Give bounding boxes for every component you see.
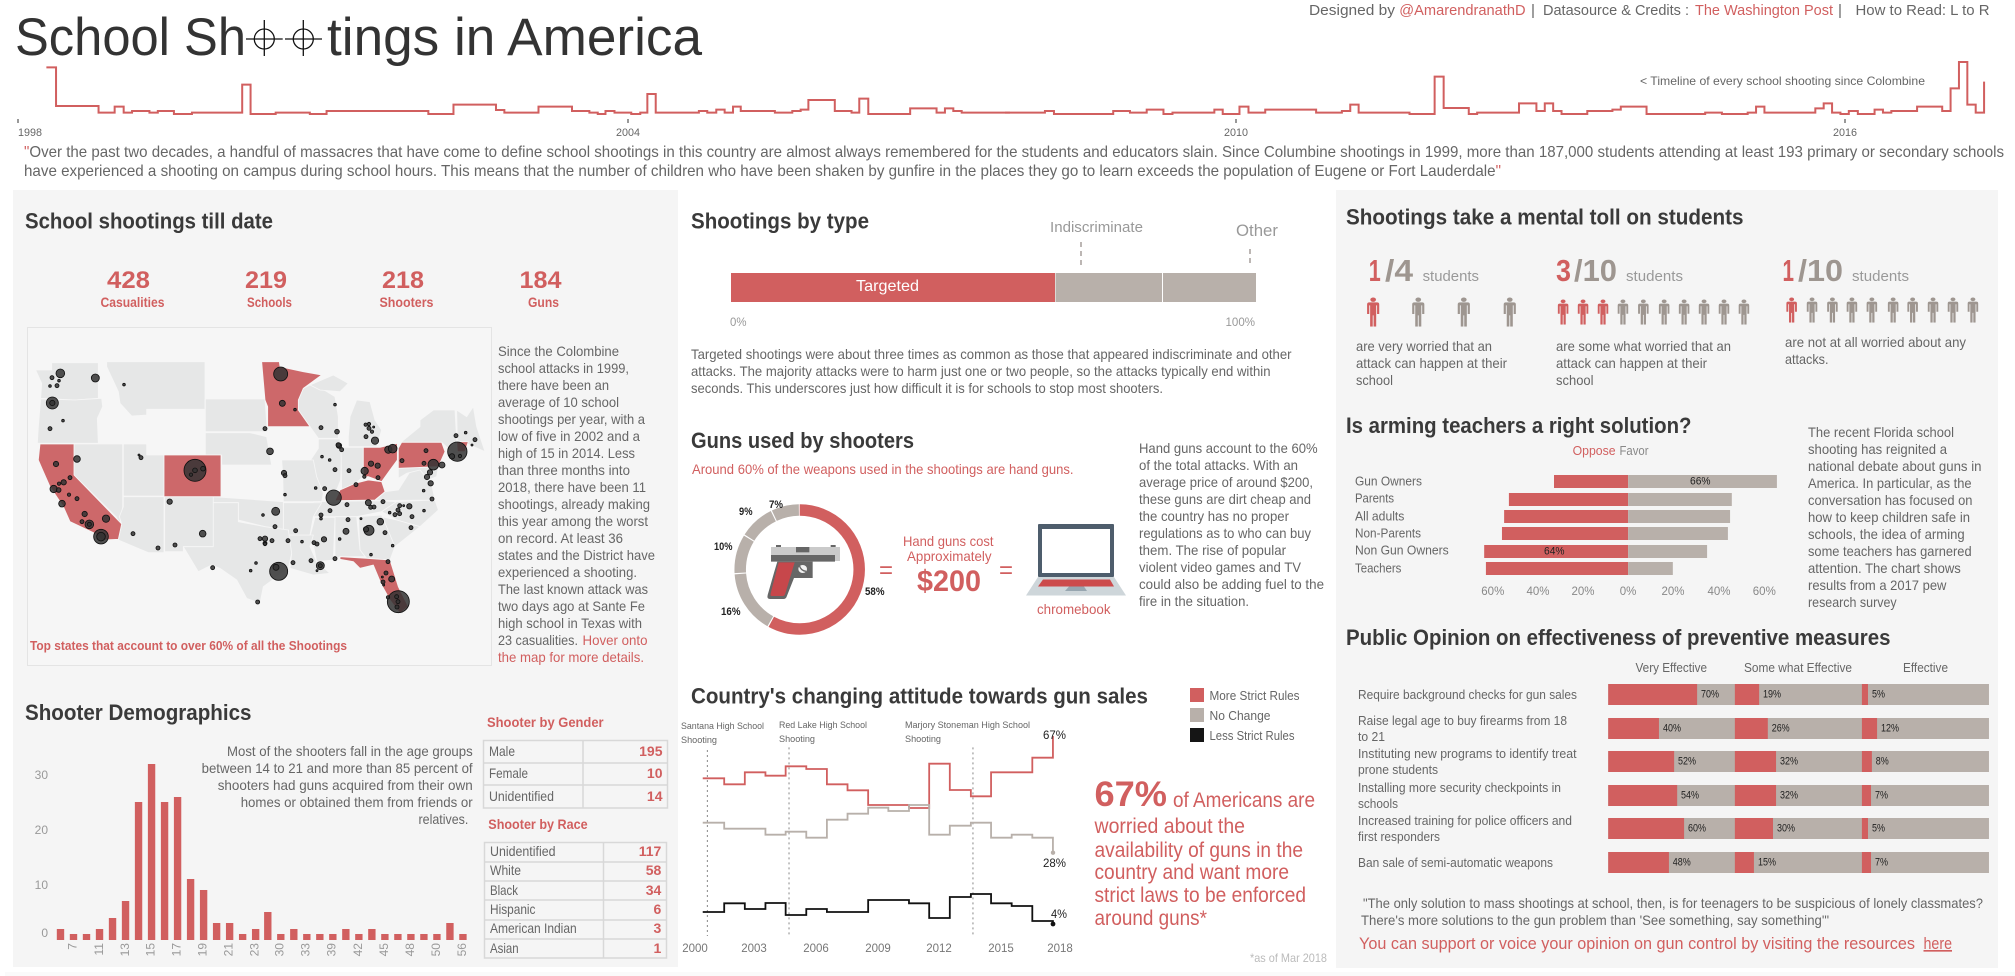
line chart: attitudes on gun sales: Shooting bbox=[905, 734, 941, 745]
text: hand guns paragraph bbox=[1139, 440, 1324, 609]
diverging bar chart: arming teachers: 60% bbox=[1753, 586, 1776, 598]
stacked bars: preventive measures: 48% bbox=[1673, 856, 1691, 868]
panel: left column bbox=[13, 190, 678, 967]
stat: one in four: 1 bbox=[1369, 253, 1381, 288]
stacked bars: preventive measures: 12% bbox=[1881, 722, 1899, 734]
callout: 67 percent of americans: country and want more bbox=[1094, 861, 1289, 884]
stacked bars: preventive measures: 19% bbox=[1763, 688, 1781, 700]
diverging bar chart: arming teachers: Parents bbox=[1355, 491, 1394, 506]
histogram: shooter age: 0 bbox=[41, 926, 48, 940]
icons: three of ten people bbox=[1558, 299, 1749, 325]
text: colombine paragraph: The last known attack was bbox=[498, 581, 648, 597]
callout: 67 percent of americans: around guns* bbox=[1094, 907, 1207, 930]
panel: right column bbox=[1336, 190, 1998, 968]
credits line: The Washington Post bbox=[1695, 2, 1834, 19]
text: hand guns paragraph: could also be adding fuel to the bbox=[1139, 576, 1324, 592]
stat: three in ten bbox=[1556, 253, 1749, 388]
line chart: attitudes on gun sales bbox=[681, 720, 1073, 955]
histogram: shooter age: 33 bbox=[299, 943, 313, 956]
line chart: attitudes on gun sales: 28% bbox=[1043, 856, 1066, 870]
line chart: attitudes on gun sales: 4% bbox=[1051, 907, 1067, 921]
credits line bbox=[1309, 2, 1990, 19]
text: colombine paragraph: there have been an bbox=[498, 377, 609, 393]
icon: chromebook laptop bbox=[1026, 524, 1126, 617]
diverging bar chart: arming teachers: 0% bbox=[1620, 586, 1636, 598]
table: shooter by gender bbox=[484, 740, 668, 808]
diverging bar chart: arming teachers: 20% bbox=[1571, 586, 1595, 598]
stacked bars: preventive measures: 7% bbox=[1875, 789, 1888, 801]
timeline step chart: 2004 bbox=[616, 127, 640, 139]
line chart: attitudes on gun sales: 2006 bbox=[803, 943, 829, 955]
line chart: attitudes on gun sales: Santana High School bbox=[681, 721, 764, 732]
table: shooter by gender: 10 bbox=[647, 765, 663, 781]
line chart: attitudes on gun sales: 2009 bbox=[865, 943, 891, 955]
text: arming teachers paragraph: attention. The chart shows bbox=[1808, 560, 1961, 576]
heading: shooter by gender: Shooter by Gender bbox=[487, 714, 604, 730]
timeline step chart: 1998 bbox=[18, 127, 42, 139]
credits line: Datasource & Credits : bbox=[1543, 2, 1689, 19]
histogram: shooter age: 56 bbox=[455, 943, 469, 956]
table: shooter by race: Hispanic bbox=[490, 901, 536, 917]
credits line: @AmarendranathD bbox=[1399, 2, 1526, 19]
donut chart: guns: 16% bbox=[721, 606, 741, 618]
text: colombine paragraph: the map for more details. bbox=[498, 649, 644, 665]
stacked bars: preventive measures: 7% bbox=[1875, 856, 1888, 868]
stacked bars: preventive measures: first responders bbox=[1358, 829, 1440, 844]
stacked bar: shootings by type: Targeted bbox=[856, 278, 919, 295]
stacked bars: preventive measures: 54% bbox=[1681, 789, 1699, 801]
text: arming teachers paragraph: shooting has reignited a bbox=[1808, 441, 1947, 457]
line chart: attitudes on gun sales: 2015 bbox=[988, 943, 1014, 955]
heading: changing attitude: Country's changing attitude towards gun sales bbox=[691, 684, 1148, 708]
table: shooter by race: 3 bbox=[654, 920, 662, 936]
text: shootings by type paragraph bbox=[691, 346, 1292, 396]
table: shooter by race: Black bbox=[490, 882, 519, 898]
table: shooter by gender: Female bbox=[489, 765, 528, 781]
panel: middle column bbox=[681, 208, 1327, 965]
heading: school shootings till date: School shootings till date bbox=[25, 208, 273, 234]
stat: shooters: Shooters bbox=[380, 294, 434, 310]
text: arming teachers paragraph: conversation has focused on bbox=[1808, 492, 1972, 508]
histogram: shooter age: 30 bbox=[273, 943, 287, 956]
line chart: attitudes on gun sales: 2000 bbox=[682, 943, 708, 955]
stacked bar: shootings by type bbox=[730, 219, 1278, 329]
table: shooter by race: 6 bbox=[654, 901, 662, 917]
histogram: shooter age: 50 bbox=[429, 943, 443, 956]
stacked bars: preventive measures: 5% bbox=[1872, 688, 1885, 700]
stat: three in ten: 3 bbox=[1556, 253, 1571, 288]
stacked bars: preventive measures: Increased training for police officers and bbox=[1358, 813, 1572, 828]
text: arming teachers paragraph: national debate about guns in bbox=[1808, 458, 1982, 474]
histogram: shooter age: 23 bbox=[248, 943, 262, 956]
legend: Less Strict Rules bbox=[1210, 729, 1294, 743]
stat: one in four: are very worried that an bbox=[1356, 338, 1492, 354]
text: colombine paragraph: Since the Colombine bbox=[498, 343, 619, 359]
line chart: attitudes on gun sales: Shooting bbox=[681, 735, 717, 746]
table: shooter by race: 117 bbox=[639, 843, 662, 859]
stacked bars: preventive measures: Very Effective bbox=[1636, 660, 1707, 675]
stat: casualities bbox=[100, 267, 165, 310]
footnote: *as of Mar 2018 bbox=[1250, 951, 1327, 965]
stat: one in four: students bbox=[1423, 268, 1479, 285]
stat: shooters: 218 bbox=[382, 267, 424, 294]
table: shooter by race: White bbox=[490, 862, 521, 878]
stat: one in four: school bbox=[1356, 372, 1393, 388]
histogram: shooter age: 48 bbox=[403, 943, 417, 956]
text: hand guns paragraph: of the total attacks. With an bbox=[1139, 457, 1298, 473]
title: tings in America bbox=[327, 8, 703, 67]
shooting location bubbles bbox=[46, 367, 477, 613]
stat: shooters bbox=[380, 267, 434, 310]
callout: 67 percent of americans: 67% bbox=[1094, 775, 1167, 814]
stat: schools: Schools bbox=[247, 294, 292, 310]
text: colombine paragraph: experienced a shooting. bbox=[498, 564, 637, 580]
text: hand guns paragraph: average price of around $200, bbox=[1139, 474, 1313, 490]
text: colombine paragraph: shootings, already making bbox=[498, 496, 650, 512]
stat: guns: Guns bbox=[528, 294, 559, 310]
call to action: You can support or voice your opinion on gun control by visiting the resources bbox=[1359, 935, 1915, 953]
histogram: shooter age: 19 bbox=[196, 943, 210, 956]
stacked bars: preventive measures: Require background checks for gun sales bbox=[1358, 687, 1577, 702]
line chart: attitudes on gun sales: 2018 bbox=[1047, 943, 1073, 955]
line chart: attitudes on gun sales: Shooting bbox=[779, 734, 815, 745]
stacked bar: shootings by type: Other bbox=[1236, 221, 1278, 240]
credits line: | bbox=[1531, 2, 1535, 19]
table: shooter by gender: 14 bbox=[647, 788, 663, 804]
stacked bars: preventive measures: prone students bbox=[1358, 762, 1438, 777]
icon: handgun bbox=[767, 545, 840, 599]
text: arming teachers paragraph: results from a 2017 pew bbox=[1808, 577, 1947, 593]
intro quote: have experienced a shooting on campus during school hours. This means that the number of children who have been shaken by gunfire in the places they go to learn exceeds the population of Eugene or Fort Lauderdale" bbox=[24, 163, 1501, 180]
stat: one in ten: attacks. bbox=[1785, 351, 1828, 367]
donut chart: guns: 7% bbox=[769, 499, 783, 511]
diverging bar chart: arming teachers: All adults bbox=[1355, 509, 1405, 524]
heading: arming teachers: Is arming teachers a right solution? bbox=[1346, 413, 1692, 438]
diverging bar chart: arming teachers: 20% bbox=[1661, 586, 1685, 598]
diverging bar chart: arming teachers bbox=[1355, 444, 1777, 598]
diverging bar chart: arming teachers: 64% bbox=[1544, 546, 1565, 558]
callout: hand gun cost bbox=[903, 533, 994, 598]
text: colombine paragraph: two days ago at Sante Fe bbox=[498, 598, 645, 614]
text: colombine paragraph: this year among the worst bbox=[498, 513, 648, 529]
stat: guns bbox=[520, 267, 562, 310]
timeline step chart: 2016 bbox=[1833, 127, 1857, 139]
line chart: attitudes on gun sales: Marjory Stoneman High School bbox=[905, 720, 1030, 731]
table: shooter by race: 34 bbox=[646, 882, 662, 898]
credits line: | bbox=[1838, 2, 1842, 19]
histogram: shooter age: 30 bbox=[35, 768, 48, 782]
stacked bars: preventive measures bbox=[1358, 660, 1989, 873]
stat: three in ten: /10 bbox=[1574, 253, 1617, 288]
stacked bars: preventive measures: 8% bbox=[1876, 755, 1889, 767]
stat: three in ten: attack can happen at their bbox=[1556, 355, 1707, 371]
title bbox=[15, 8, 703, 67]
text: arming teachers paragraph: research survey bbox=[1808, 594, 1897, 610]
icons: one of four people bbox=[1367, 297, 1516, 327]
text: demographics paragraph: Most of the shooters fall in the age groups bbox=[227, 743, 473, 759]
stacked bars: preventive measures: 52% bbox=[1678, 755, 1696, 767]
histogram: shooter age: 13 bbox=[118, 943, 132, 956]
line chart: attitudes on gun sales: 2012 bbox=[926, 943, 952, 955]
stacked bars: preventive measures: Instituting new programs to identify treat bbox=[1358, 746, 1577, 761]
stacked bars: preventive measures: schools bbox=[1358, 796, 1398, 811]
callout: 67 percent of americans bbox=[1094, 775, 1315, 930]
text: colombine paragraph: on record. At least 36 bbox=[498, 530, 623, 546]
stacked bar: shootings by type: Indiscriminate bbox=[1050, 219, 1143, 236]
histogram: shooter age: 11 bbox=[92, 943, 106, 955]
text: demographics paragraph: homes or obtained them from friends or bbox=[241, 794, 473, 810]
stat: one in four: /4 bbox=[1385, 253, 1414, 288]
histogram: shooter age: 7 bbox=[65, 943, 79, 950]
stat: three in ten: school bbox=[1556, 372, 1594, 388]
heading: shooter by race: Shooter by Race bbox=[488, 816, 588, 832]
stat: one in ten bbox=[1782, 253, 1978, 367]
closing quote bbox=[1361, 895, 1983, 928]
text: hand guns paragraph: regulations as to who can buy bbox=[1139, 525, 1311, 541]
stacked bars: preventive measures: 26% bbox=[1772, 722, 1790, 734]
stat: one in ten: 1 bbox=[1782, 253, 1794, 288]
stat: one in four bbox=[1356, 253, 1516, 388]
equals sign: = bbox=[879, 557, 893, 584]
stat: one in ten: /10 bbox=[1798, 253, 1843, 288]
icon: chromebook laptop: chromebook bbox=[1037, 601, 1111, 617]
text: hand guns paragraph: violent video games and TV bbox=[1139, 559, 1302, 575]
text: colombine paragraph: states and the District have bbox=[498, 547, 655, 563]
table: shooter by race: 58 bbox=[646, 862, 662, 878]
map caption: Top states that account to over 60% of all the Shootings bbox=[30, 638, 347, 653]
callout: hand gun cost: $200 bbox=[917, 565, 981, 598]
legend: More Strict Rules bbox=[1210, 689, 1300, 703]
stat: one in ten: are not at all worried about any bbox=[1785, 334, 1966, 350]
legend: No Change bbox=[1210, 709, 1271, 723]
table: shooter by race: American Indian bbox=[490, 920, 577, 936]
stat: schools: 219 bbox=[245, 267, 287, 294]
call to action: here bbox=[1924, 935, 1952, 953]
text: demographics paragraph: relatives. bbox=[418, 811, 468, 827]
diverging bar chart: arming teachers: 66% bbox=[1690, 476, 1711, 488]
table: shooter by gender: Unidentified bbox=[489, 788, 554, 804]
stacked bars: preventive measures: 32% bbox=[1780, 755, 1798, 767]
heading: public opinion: Public Opinion on effectiveness of preventive measures bbox=[1346, 625, 1890, 650]
histogram: shooter age: 45 bbox=[377, 943, 391, 956]
stat: guns: 184 bbox=[520, 267, 562, 294]
closing quote: There's more solutions to the gun problem than 'See something, say something'" bbox=[1361, 912, 1829, 928]
stat: three in ten: are some what worried that an bbox=[1556, 338, 1731, 354]
text: colombine paragraph: school attacks in 1999, bbox=[498, 360, 629, 376]
table: shooter by gender: Male bbox=[489, 743, 515, 759]
timeline step chart: 2010 bbox=[1224, 127, 1248, 139]
text: colombine paragraph: than three months into bbox=[498, 462, 630, 478]
text: arming teachers paragraph: schools, the idea of arming bbox=[1808, 526, 1965, 542]
heading: shootings by type: Shootings by type bbox=[691, 208, 869, 234]
callout: 67 percent of americans: availability of guns in the bbox=[1094, 839, 1303, 862]
us state map bbox=[36, 362, 485, 613]
stacked bars: preventive measures: to 21 bbox=[1358, 729, 1385, 744]
text: demographics paragraph bbox=[202, 743, 473, 827]
stacked bar: shootings by type: 100% bbox=[1226, 315, 1255, 329]
diverging bar chart: arming teachers: Gun Owners bbox=[1355, 474, 1422, 489]
icons: one of ten people bbox=[1786, 297, 1978, 323]
callout: hand gun cost: Approximately bbox=[907, 548, 992, 564]
histogram: shooter age: 17 bbox=[170, 943, 184, 956]
histogram: shooter age: 15 bbox=[144, 943, 158, 956]
histogram: shooter age: 42 bbox=[351, 943, 365, 956]
stacked bars: preventive measures: Ban sale of semi-automatic weapons bbox=[1358, 855, 1553, 870]
text: arming teachers paragraph: America. In particular, as the bbox=[1808, 475, 1972, 491]
text: colombine paragraph: low of five in 2002 and a bbox=[498, 428, 640, 444]
map box bbox=[28, 328, 492, 666]
stacked bars: preventive measures: Effective bbox=[1903, 660, 1948, 675]
histogram: shooter age: 10 bbox=[35, 878, 48, 892]
text: demographics paragraph: between 14 to 21 and more than 85 percent of bbox=[202, 760, 473, 776]
diverging bar chart: arming teachers: Favor bbox=[1620, 444, 1648, 458]
diverging bar chart: arming teachers: 40% bbox=[1707, 586, 1731, 598]
stacked bars: preventive measures: Some what Effective bbox=[1744, 660, 1852, 675]
stat: three in ten: students bbox=[1626, 268, 1683, 285]
stat: casualities: Casualities bbox=[100, 294, 165, 310]
highlighted top states bbox=[38, 362, 468, 613]
text: colombine paragraph: shootings per year, with a bbox=[498, 411, 645, 427]
histogram: shooter age: 21 bbox=[222, 943, 236, 956]
text: shootings by type paragraph: seconds. This underscores just how difficult it is for schools to stop most shooters. bbox=[691, 380, 1163, 396]
histogram: shooter age: 20 bbox=[35, 823, 48, 837]
text: colombine paragraph: Hover onto bbox=[582, 632, 648, 648]
table: shooter by race: 1 bbox=[654, 940, 662, 956]
stat: casualities: 428 bbox=[107, 267, 150, 294]
table: shooter by race: Asian bbox=[490, 940, 519, 956]
diverging bar chart: arming teachers: Non Gun Owners bbox=[1355, 543, 1449, 558]
text: hand guns paragraph: these guns are dirt cheap and bbox=[1139, 491, 1311, 507]
stacked bars: preventive measures: 30% bbox=[1777, 822, 1795, 834]
line chart: attitudes on gun sales: 67% bbox=[1043, 728, 1066, 742]
donut chart: guns: 9% bbox=[739, 506, 753, 518]
text: colombine paragraph: average of 10 school bbox=[498, 394, 619, 410]
diverging bar chart: arming teachers: Non-Parents bbox=[1355, 526, 1421, 541]
table: shooter by race bbox=[484, 842, 666, 958]
diverging bar chart: arming teachers: Oppose bbox=[1573, 444, 1616, 458]
table: shooter by race: Unidentified bbox=[490, 843, 556, 859]
heading: guns used by shooters: Guns used by shooters bbox=[691, 428, 914, 453]
text: hand guns paragraph: them. The rise of popular bbox=[1139, 542, 1286, 558]
stacked bars: preventive measures: 40% bbox=[1663, 722, 1681, 734]
text: demographics paragraph: shooters had guns acquired from their own bbox=[218, 777, 473, 793]
timeline step chart: < Timeline of every school shooting since Colombine bbox=[1640, 74, 1925, 88]
callout: hand gun cost: Hand guns cost bbox=[903, 533, 994, 549]
subheading: hand guns share: Around 60% of the weapons used in the shootings are hand guns. bbox=[692, 461, 1074, 477]
text: colombine paragraph: 23 casualities. bbox=[498, 632, 578, 648]
donut chart: guns bbox=[714, 499, 885, 629]
text: arming teachers paragraph: The recent Florida school bbox=[1808, 424, 1954, 440]
stacked bar: shootings by type: 0% bbox=[730, 315, 747, 329]
table: shooter by gender: 195 bbox=[639, 743, 663, 759]
histogram: shooter age: 39 bbox=[325, 943, 339, 956]
line chart: attitudes on gun sales: Red Lake High School bbox=[779, 720, 867, 731]
timeline step chart bbox=[18, 62, 1984, 139]
stacked bars: preventive measures: 5% bbox=[1872, 822, 1885, 834]
text: arming teachers paragraph bbox=[1808, 424, 1982, 610]
intro quote bbox=[24, 144, 2004, 180]
text: arming teachers paragraph: how to keep children safe in bbox=[1808, 509, 1970, 525]
stat: one in ten: students bbox=[1852, 268, 1909, 285]
stacked bars: preventive measures: 32% bbox=[1780, 789, 1798, 801]
text: hand guns paragraph: Hand guns account to the 60% bbox=[1139, 440, 1318, 456]
histogram: shooter age bbox=[35, 764, 469, 956]
stat: schools bbox=[245, 267, 292, 310]
line chart: attitudes on gun sales: 2003 bbox=[741, 943, 767, 955]
text: colombine paragraph bbox=[498, 343, 655, 665]
text: shootings by type paragraph: Targeted shootings were about three times as common as those that appeared indiscriminate and other bbox=[691, 346, 1292, 362]
credits line: Designed by bbox=[1309, 2, 1396, 19]
stat: one in four: attack can happen at their bbox=[1356, 355, 1507, 371]
donut chart: guns: 58% bbox=[865, 586, 885, 598]
callout: 67 percent of americans: worried about the bbox=[1094, 815, 1245, 838]
stacked bars: preventive measures: 60% bbox=[1688, 822, 1706, 834]
stacked bars: preventive measures: 15% bbox=[1758, 856, 1776, 868]
heading: mental toll: Shootings take a mental toll on students bbox=[1346, 204, 1744, 230]
equals sign: = bbox=[999, 557, 1013, 584]
closing quote: "The only solution to mass shootings at school, then, is for teenagers to be suspicious of lonely classmates? bbox=[1363, 895, 1983, 911]
stacked bars: preventive measures: Installing more security checkpoints in bbox=[1358, 780, 1561, 795]
stacked bars: preventive measures: 70% bbox=[1701, 688, 1719, 700]
text: colombine paragraph: 2018, there have been 11 bbox=[498, 479, 646, 495]
callout: 67 percent of americans: of Americans are bbox=[1173, 789, 1315, 812]
diverging bar chart: arming teachers: Teachers bbox=[1355, 561, 1402, 576]
text: colombine paragraph: high of 15 in 2014. Less bbox=[498, 445, 635, 461]
stacked bars: preventive measures: Raise legal age to buy firearms from 18 bbox=[1358, 713, 1567, 728]
donut chart: guns: 10% bbox=[714, 541, 733, 553]
text: hand guns paragraph: fire in the situation. bbox=[1139, 593, 1249, 609]
credits line: How to Read: L to R bbox=[1856, 2, 1990, 19]
text: colombine paragraph: high school in Texas with bbox=[498, 615, 642, 631]
text: arming teachers paragraph: some teachers has garnered bbox=[1808, 543, 1972, 559]
diverging bar chart: arming teachers: 40% bbox=[1526, 586, 1550, 598]
text: shootings by type paragraph: attacks. The majority attacks were to harm just one or two people, so the attacks typically end within bbox=[691, 363, 1270, 379]
title: School Sh bbox=[15, 8, 246, 67]
callout: 67 percent of americans: strict laws to be enforced bbox=[1094, 884, 1306, 907]
diverging bar chart: arming teachers: 60% bbox=[1481, 586, 1504, 598]
legend bbox=[1190, 688, 1300, 743]
heading: shooter demographics: Shooter Demographics bbox=[25, 700, 252, 725]
text: hand guns paragraph: the country has no proper bbox=[1139, 508, 1289, 524]
